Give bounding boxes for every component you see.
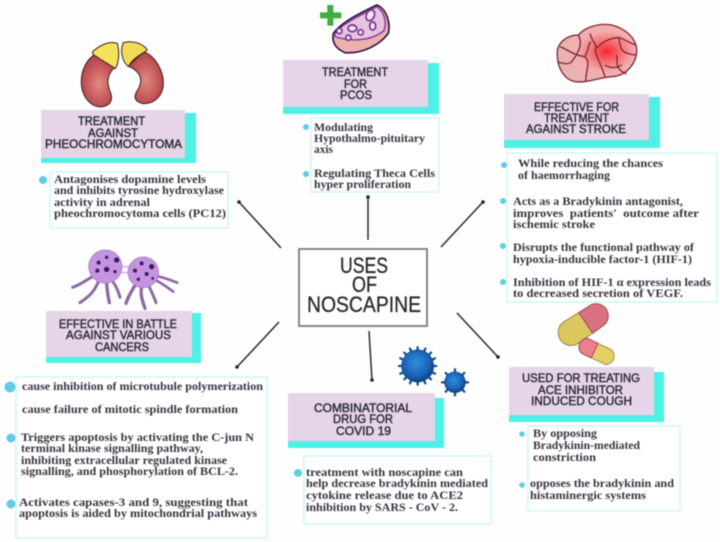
text block: PCOS details: axis: [314, 142, 333, 156]
text block: covid details: [294, 456, 491, 524]
heading: treatment against pheochromocytoma: PHEOCHROMOCYTOMA: [45, 139, 182, 151]
panel: pheochromocytoma: [39, 42, 228, 228]
text block: cancers details: signalling, and phosphorylation of BCL-2.: [21, 464, 238, 478]
text block: PCOS details: hyper proliferation: [314, 177, 411, 191]
text block: cancers details: terminal kinase signalling pathway,: [21, 441, 203, 455]
text block: stroke details: of haemorrhaging: [518, 168, 610, 182]
heading: treatment against pheochromocytoma: [41, 110, 196, 163]
text block: pheochromocytoma details: and inhibits tyrosine hydroxylase: [54, 183, 225, 197]
text block: stroke details: [500, 153, 717, 302]
heading: treatment for PCOS: TREATMENT: [322, 67, 388, 79]
text block: cough details: constriction: [533, 450, 596, 464]
text block: stroke details: ischemic stroke: [513, 217, 596, 231]
text block: cancers details: cause failure of mitotic spindle formation: [22, 402, 238, 416]
text block: pheochromocytoma details: Antagonises dopamine levels: [54, 172, 206, 186]
heading: treatment against pheochromocytoma: TREATMENT: [78, 116, 145, 128]
text block: cancers details: Activates capases-3 and 9, suggesting that: [19, 495, 248, 509]
text block: PCOS details: [303, 118, 439, 192]
text block: cancers details: cause inhibition of microtubule polymerization: [22, 379, 263, 393]
text block: stroke details: hypoxia-inducible factor-1 (HIF-1): [513, 252, 692, 266]
text block: stroke details: improves patients' outcome after: [513, 206, 700, 220]
text block: cough details: opposes the bradykinin and: [530, 476, 674, 490]
text block: cough details: By opposing: [533, 426, 597, 440]
heading: effective for treatment against stroke: [504, 94, 660, 148]
heading: effective in battle against various cancers: [46, 311, 201, 363]
icon: coronavirus particles: [399, 347, 468, 395]
text block: stroke details: Acts as a Bradykinin antagonist,: [513, 194, 683, 208]
arrow: to stroke: [441, 200, 485, 247]
arrow: to cancers: [235, 322, 279, 369]
title box: uses of noscapine: NOSCAPINE: [307, 292, 421, 317]
text block: cancers details: apoptosis is aided by mitochondrial pathways: [19, 506, 257, 520]
text block: cough details: Bradykinin-mediated: [533, 438, 640, 452]
heading: used for treating ace inhibitor induced cough: INDUCED COUGH: [531, 396, 632, 408]
text block: cancers details: Triggers apoptosis by activating the C-jun N: [21, 430, 254, 444]
text block: stroke details: to decreased secretion of VEGF.: [513, 286, 683, 300]
icon: dividing cancer cells: [73, 250, 177, 308]
text block: pheochromocytoma details: activity in adrenal: [54, 195, 151, 209]
heading: effective in battle against various cancers: AGAINST VARIOUS: [66, 330, 171, 342]
heading: treatment for PCOS: [283, 60, 439, 114]
text block: cough details: [519, 426, 680, 511]
text block: stroke details: Disrupts the functional pathway of: [513, 240, 695, 254]
text block: PCOS details: Modulating: [314, 120, 373, 134]
title box: uses of noscapine: [299, 249, 427, 326]
text block: cough details: histaminergic systems: [530, 488, 646, 502]
text block: covid details: treatment with noscapine can: [306, 465, 463, 479]
heading: effective for treatment against stroke: AGAINST STROKE: [526, 124, 626, 136]
text block: PCOS details: Hypothalmo-pituitary: [314, 131, 425, 145]
icon: capsules: [558, 304, 614, 365]
heading: treatment for PCOS: FOR: [344, 79, 367, 91]
arrow: to PCOS: [366, 195, 370, 240]
icon: ovary with green plus: [320, 5, 389, 53]
text block: stroke details: While reducing the chances: [518, 156, 663, 170]
panel: PCOS: [283, 5, 439, 192]
text block: PCOS details: Regulating Theca Cells: [314, 166, 435, 180]
text block: pheochromocytoma details: [39, 172, 228, 228]
heading: treatment for PCOS: PCOS: [340, 90, 372, 102]
panel: cancers: [4, 250, 267, 538]
text block: stroke details: Inhibition of HIF-1 α expression leads: [513, 275, 711, 289]
heading: effective for treatment against stroke: TREATMENT: [544, 113, 609, 125]
heading: effective in battle against various cancers: EFFECTIVE IN BATTLE: [59, 319, 177, 331]
heading: used for treating ace inhibitor induced cough: ACE INHIBITOR: [538, 385, 623, 397]
heading: combinatorial drug for covid 19: COMBINATORIAL: [314, 403, 413, 415]
arrow: to cough: [457, 313, 500, 359]
heading: effective in battle against various cancers: CANCERS: [95, 342, 149, 354]
heading: used for treating ace inhibitor induced cough: [509, 367, 664, 422]
arrow: to pheochromocytoma: [237, 200, 281, 248]
text block: covid details: cytokine release due to ACE2: [306, 488, 463, 502]
text block: pheochromocytoma details: pheochromocytoma cells (PC12): [54, 206, 226, 220]
heading: used for treating ace inhibitor induced cough: USED FOR TREATING: [522, 373, 640, 385]
heading: combinatorial drug for covid 19: [288, 393, 444, 448]
heading: effective for treatment against stroke: EFFECTIVE FOR: [534, 102, 619, 114]
panel: covid 19: [288, 347, 491, 524]
title box: uses of noscapine: OF: [352, 272, 377, 297]
icon: kidneys with adrenal glands: [81, 42, 163, 107]
heading: combinatorial drug for covid 19: DRUG FOR: [333, 414, 393, 426]
text block: covid details: inhibition by SARS - CoV - 2.: [306, 500, 458, 514]
icon: brain with red focal area: [557, 24, 637, 82]
arrow: to covid 19: [369, 331, 374, 382]
text block: cancers details: inhibiting extracellular regulated kinase: [21, 453, 228, 467]
panel: ACE inhibitor cough: [509, 304, 680, 511]
text block: covid details: help decrease bradykinin mediated: [306, 476, 488, 490]
text block: cancers details: [4, 377, 267, 538]
heading: treatment against pheochromocytoma: AGAINST: [88, 128, 138, 140]
panel: stroke: [500, 24, 717, 302]
title box: uses of noscapine: USES: [340, 253, 388, 278]
heading: combinatorial drug for covid 19: COVID 19: [336, 426, 391, 438]
